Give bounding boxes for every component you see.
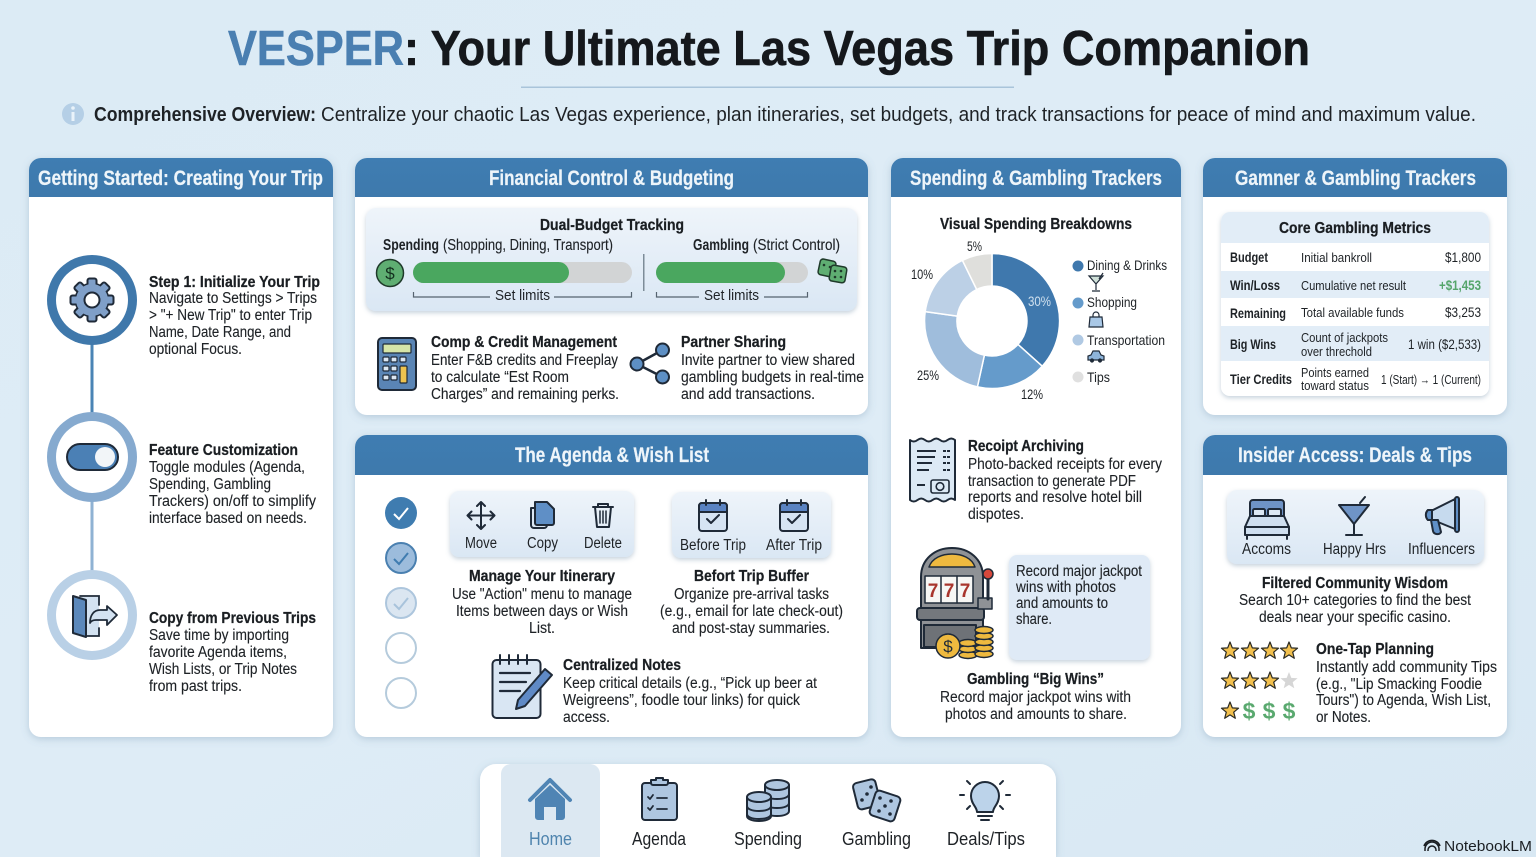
row: tier credits: Points earned — [1301, 365, 1369, 380]
icon: slot machine — [917, 548, 993, 658]
row: tier credits — [1230, 365, 1481, 393]
legend: Dining & Drinks — [1087, 257, 1167, 273]
text: gambling big wins: photos and amounts to share. — [945, 706, 1127, 723]
text: manage your itinerary: Use "Action" menu to manage — [452, 586, 632, 603]
nav item: home — [501, 764, 600, 857]
heading: financial control: Financial Control & Budgeting — [489, 167, 734, 190]
text: before trip buffer: (e.g., email for late check-out) — [660, 603, 843, 620]
row: tier credits: 1 (Start) → 1 (Current) — [1381, 373, 1481, 387]
overview text block: Centralize your chaotic Las Vegas experience, plan itineraries, set budgets, and track transactions for peace of mind and maximum value. — [321, 104, 1476, 126]
icon: bed — [1245, 500, 1289, 539]
text: copy from previous trips: favorite Agenda items, — [149, 644, 287, 661]
icon: notepad and pen — [492, 655, 552, 718]
table: core gambling metrics: Core Gambling Metrics — [1279, 220, 1431, 237]
donut labels — [911, 238, 1051, 402]
nav item: agenda: Agenda — [632, 829, 687, 849]
nav item: spending — [734, 780, 802, 849]
icon: bag — [1089, 312, 1103, 327]
text: comp and credit: Charges” and remaining perks. — [431, 386, 619, 403]
card: item actions: Copy — [527, 535, 558, 552]
icon: calendar after — [780, 500, 808, 531]
heading: gamner — [1203, 158, 1507, 197]
card: deal categories: Happy Hrs — [1323, 541, 1386, 558]
icon: share — [630, 344, 669, 384]
text: feature customization: Trackers) on/off to simplify — [149, 493, 316, 510]
nav item: home: Home — [529, 829, 572, 849]
donut labels: 12% — [1021, 386, 1043, 402]
heading: insider access: Insider Access: Deals & Tips — [1238, 444, 1472, 467]
row: remaining: $3,253 — [1445, 304, 1481, 320]
icon: trash — [593, 504, 613, 527]
card: deal categories: Influencers — [1408, 541, 1475, 558]
text: centralized notes: Weigreens”, foodle tour links) for quick — [563, 692, 800, 709]
text: comp and credit: Enter F&B credits and Freeplay — [431, 352, 618, 369]
row: remaining — [1230, 304, 1481, 321]
dollar ratings: $ — [1283, 698, 1296, 724]
panel: getting started — [29, 158, 333, 737]
text: centralized notes — [563, 657, 818, 726]
text: comp and credit: Comp & Credit Management — [431, 334, 618, 351]
card: trip buffer: Before Trip — [680, 537, 746, 554]
row: budget: Budget — [1230, 249, 1268, 265]
text: partner sharing: Invite partner to view shared — [681, 352, 855, 369]
text: centralized notes: Centralized Notes — [563, 657, 681, 674]
nav item: gambling — [842, 778, 911, 849]
icon: green dice — [818, 259, 847, 283]
panel: gamner and gambling trackers — [1203, 158, 1507, 415]
row: big wins: over threchold — [1301, 344, 1372, 359]
icon: megaphone — [1426, 497, 1459, 534]
card: deal categories — [1227, 490, 1484, 564]
dollar ratings: $ — [1263, 698, 1276, 724]
bar: spending budget — [413, 262, 632, 283]
text: one-tap planning: (e.g., "Lip Smacking Foodie — [1316, 676, 1482, 693]
text: one-tap planning — [1316, 641, 1497, 726]
icon: copy from door — [47, 570, 137, 660]
text: before trip buffer: and post-stay summaries. — [672, 620, 830, 637]
text: partner sharing: gambling budgets in real-time — [681, 369, 864, 386]
card: dual-budget tracking: Spending — [383, 237, 439, 254]
icon: copy — [531, 502, 554, 528]
panel: agenda and wish list — [355, 435, 868, 737]
card: dual-budget tracking — [366, 208, 857, 311]
icon: dollar coin: $ — [385, 264, 395, 283]
callout: jackpot: share. — [1016, 611, 1052, 628]
label: set limits spending: Set limits — [495, 287, 550, 304]
text: filtered community wisdom — [1239, 575, 1472, 626]
text: receipt archiving: transaction to generate PDF — [968, 473, 1136, 490]
row: tier credits: Tier Credits — [1230, 371, 1292, 387]
heading: spending trackers: Spending & Gambling Trackers — [910, 167, 1162, 190]
text: one-tap planning: One-Tap Planning — [1316, 641, 1434, 658]
icon: calendar before — [699, 500, 727, 531]
overview text block: Comprehensive Overview: — [94, 104, 316, 126]
dollar ratings — [1243, 698, 1296, 724]
heading: agenda: The Agenda & Wish List — [515, 444, 709, 467]
text: manage your itinerary: Items between days or Wish — [456, 603, 628, 620]
icon: gear — [47, 255, 137, 345]
text: one-tap planning: Instantly add community Tips — [1316, 659, 1497, 676]
card: dual-budget tracking: (Strict Control) — [753, 237, 840, 254]
row: remaining: Total available funds — [1301, 305, 1404, 320]
icon: calculator — [378, 338, 416, 390]
label: set limits gambling — [656, 287, 808, 304]
text: receipt archiving: dispotes. — [968, 506, 1024, 523]
text: partner sharing: and add transactions. — [681, 386, 815, 403]
donut labels: 25% — [917, 367, 939, 383]
icon: martini — [1339, 497, 1369, 535]
heading: getting started: Getting Started: Creating Your Trip — [38, 167, 323, 190]
icon: ratings — [1221, 642, 1298, 718]
row: tier credits: toward status — [1301, 378, 1369, 393]
text: comp and credit — [431, 334, 619, 403]
row: remaining: Remaining — [1230, 305, 1286, 321]
text: receipt archiving: reports and resolve hotel bill — [968, 489, 1142, 506]
table: core gambling metrics — [1221, 212, 1489, 396]
text: manage your itinerary — [452, 568, 632, 637]
text: copy from previous trips: Copy from Previous Trips — [149, 610, 316, 627]
bar: gambling budget — [656, 262, 808, 283]
text: feature customization: Feature Customization — [149, 442, 298, 459]
row: budget — [1230, 249, 1481, 265]
text: step 1 — [149, 274, 320, 358]
bottom navigation — [480, 764, 1056, 857]
row: big wins: Big Wins — [1230, 336, 1276, 352]
nav item: deals and tips: Deals/Tips — [947, 829, 1025, 849]
text: receipt archiving — [968, 438, 1162, 523]
slot machine symbols: 7 — [960, 581, 970, 602]
text: step 1: Name, Date Range, and — [149, 324, 291, 341]
legend: Shopping — [1087, 294, 1137, 310]
title: VESPER — [228, 22, 404, 76]
subheading: visual spending breakdowns: Visual Spending Breakdowns — [940, 216, 1132, 233]
panel: financial control — [355, 158, 868, 415]
text: gambling big wins: Record major jackpot wins with — [940, 689, 1131, 706]
label: set limits gambling: Set limits — [704, 287, 759, 304]
slot machine symbols — [928, 581, 970, 656]
text: copy from previous trips: Wish Lists, or Trip Notes — [149, 661, 297, 678]
text: step 1: Step 1: Initialize Your Trip — [149, 274, 320, 291]
row: big wins — [1230, 330, 1481, 359]
text: copy from previous trips — [149, 610, 316, 695]
slot machine symbols: 7 — [928, 581, 938, 602]
card: item actions — [450, 491, 634, 557]
text: partner sharing — [681, 334, 864, 403]
row: win/loss — [1230, 277, 1481, 293]
text: one-tap planning: or Notes. — [1316, 709, 1371, 726]
donut labels: 10% — [911, 266, 933, 282]
text: one-tap planning: Tours") to Agenda, Wish List, — [1316, 692, 1491, 709]
row: win/loss: +$1,453 — [1439, 277, 1481, 293]
icon: dollar coin — [376, 260, 404, 286]
text: before trip buffer — [660, 568, 843, 637]
donut labels: 5% — [967, 238, 982, 254]
card: trip buffer — [672, 492, 831, 558]
nav item: deals and tips — [947, 781, 1025, 849]
text: manage your itinerary: Manage Your Itinerary — [469, 568, 615, 585]
text: step 1: > "+ New Trip" to enter Trip — [149, 307, 312, 324]
row: budget: Initial bankroll — [1301, 250, 1372, 265]
heading: getting started — [29, 158, 333, 197]
label: set limits spending — [414, 287, 632, 304]
text: feature customization: Toggle modules (Agenda, — [149, 459, 305, 476]
text: feature customization: interface based on needs. — [149, 510, 307, 527]
card: deal categories: Accoms — [1242, 541, 1291, 558]
card: dual-budget tracking: Dual-Budget Tracking — [540, 217, 684, 234]
row: budget: $1,800 — [1445, 249, 1481, 265]
checklist — [385, 497, 417, 708]
nav item: spending: Spending — [734, 829, 802, 849]
text: manage your itinerary: List. — [529, 620, 555, 637]
title: : Your Ultimate Las Vegas Trip Companion — [404, 22, 1310, 76]
text: filtered community wisdom: deals near your specific casino. — [1259, 609, 1451, 626]
dollar ratings: $ — [1243, 698, 1256, 724]
slot machine symbols: 7 — [944, 581, 954, 602]
panel: insider access — [1203, 435, 1507, 737]
text: receipt archiving: Recoipt Archiving — [968, 438, 1084, 455]
heading: gamner: Gamner & Gambling Trackers — [1235, 167, 1476, 190]
text: feature customization: Spending, Gambling — [149, 476, 271, 493]
text: copy from previous trips: Save time by importing — [149, 627, 289, 644]
heading: agenda — [355, 435, 868, 475]
icon: receipt — [910, 438, 955, 502]
legend — [1072, 257, 1167, 385]
card: trip buffer: After Trip — [766, 537, 822, 554]
icon: cocktail — [1089, 273, 1103, 291]
text: receipt archiving: Photo-backed receipts for every — [968, 456, 1162, 473]
callout: jackpot: and amounts to — [1016, 595, 1108, 612]
text: centralized notes: Keep critical details (e.g., “Pick up beer at — [563, 675, 818, 692]
text: gambling big wins — [940, 671, 1131, 723]
text: copy from previous trips: from past trips. — [149, 678, 242, 695]
text: filtered community wisdom: Filtered Community Wisdom — [1262, 575, 1448, 592]
donut labels: 30% — [1028, 293, 1051, 309]
legend: Transportation — [1087, 332, 1165, 348]
callout: jackpot: Record major jackpot — [1016, 563, 1143, 580]
heading: spending trackers — [891, 158, 1181, 197]
icon: toggle — [47, 412, 137, 502]
row: big wins: Count of jackpots — [1301, 330, 1388, 345]
row: win/loss: Cumulative net result — [1301, 278, 1406, 293]
panel: spending and gambling trackers — [891, 158, 1181, 737]
text: step 1: optional Focus. — [149, 341, 242, 358]
nav item: gambling: Gambling — [842, 829, 911, 849]
text: before trip buffer: Organize pre-arrival tasks — [674, 586, 829, 603]
heading: insider access — [1203, 435, 1507, 475]
icon: move — [468, 502, 494, 529]
card: dual-budget tracking: (Shopping, Dining, Transport) — [443, 237, 613, 254]
legend: Tips — [1087, 369, 1110, 385]
text: comp and credit: to calculate “Est Room — [431, 369, 569, 386]
card: dual-budget tracking: Gambling — [693, 237, 749, 254]
text: before trip buffer: Befort Trip Buffer — [694, 568, 809, 585]
nav item: agenda — [632, 778, 687, 849]
heading: financial control — [355, 158, 868, 197]
donut chart — [925, 253, 1060, 389]
text: partner sharing: Partner Sharing — [681, 334, 786, 351]
callout: jackpot — [1009, 555, 1150, 660]
row: win/loss: Win/Loss — [1230, 277, 1280, 293]
text: filtered community wisdom: Search 10+ categories to find the best — [1239, 592, 1472, 609]
slot machine symbols: $ — [943, 637, 953, 656]
text: centralized notes: access. — [563, 709, 610, 726]
text: feature customization — [149, 442, 316, 527]
watermark: NotebookLM: NotebookLM — [1444, 838, 1532, 855]
icon: car — [1088, 351, 1104, 362]
text: gambling big wins: Gambling “Big Wins” — [967, 671, 1104, 688]
text: step 1: Navigate to Settings > Trips — [149, 290, 317, 307]
callout: jackpot: wins with photos — [1015, 579, 1116, 596]
card: item actions: Delete — [584, 535, 622, 552]
row: big wins: 1 win ($2,533) — [1408, 336, 1481, 352]
card: item actions: Move — [465, 535, 497, 552]
